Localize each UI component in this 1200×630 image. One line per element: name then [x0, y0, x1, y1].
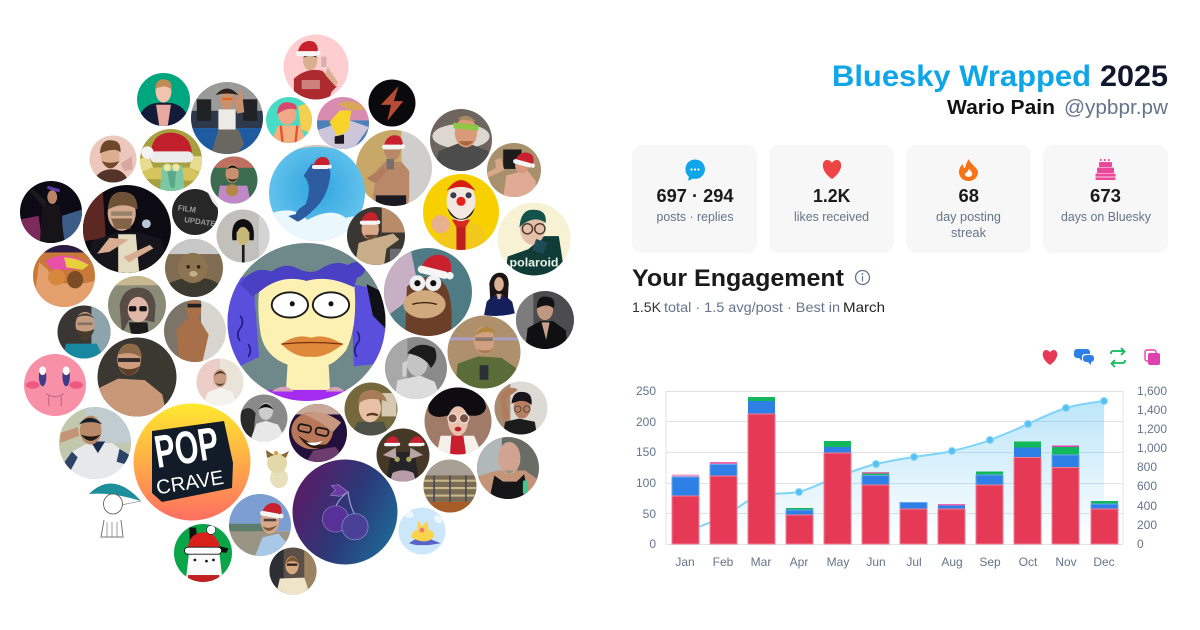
- bar Mar: [748, 397, 775, 544]
- avatar: man with polaroid shirt: polaroid: [510, 256, 558, 270]
- month labels: Jul: [906, 555, 922, 569]
- avatar: wig on stand: [216, 210, 270, 262]
- avatar: bearded man curly hair: [90, 136, 136, 182]
- avatar: kirby pink face: [24, 354, 86, 416]
- left axis labels: 100: [636, 476, 656, 490]
- avatar: person on bus seats: [191, 82, 263, 154]
- avatar: meowth sprite: [266, 450, 289, 488]
- avatar: blond man in green shirt: [448, 316, 520, 388]
- right axis labels: 1,400: [1137, 403, 1167, 417]
- avatar: man in black jacket: [516, 291, 574, 349]
- month labels: [675, 555, 1115, 569]
- avatar: bald man in black tank: [477, 437, 539, 499]
- avatar: cartoon duck-lipped character with purple hair: [228, 243, 386, 401]
- avatar: man with santa hat at desk: [347, 207, 405, 265]
- avatar: man on stage: [20, 181, 82, 243]
- month labels: Sep: [979, 555, 1001, 569]
- avatar: pochacco with santa hat: [174, 524, 232, 582]
- panel: stat streak: [906, 145, 1031, 253]
- bar Jul: [900, 502, 927, 544]
- panel: stat posts and replies: [632, 145, 757, 253]
- avatar: rainbow party shirtless: [33, 245, 95, 307]
- cumulative area: [685, 401, 1104, 544]
- avatar: pop crave logo: POP: [151, 417, 222, 478]
- bar Sep: [976, 472, 1003, 544]
- engagement summary: [632, 299, 885, 315]
- right axis labels: 400: [1137, 499, 1157, 513]
- chart legend: [1043, 348, 1160, 367]
- month labels: Dec: [1093, 555, 1115, 569]
- right axis labels: 1,200: [1137, 422, 1167, 436]
- bar Jan: [672, 474, 699, 544]
- left axis labels: 250: [636, 384, 656, 398]
- avatar: film updates sticker: [172, 189, 221, 235]
- avatar: man in tan cap: [344, 382, 398, 436]
- avatar: man with glasses in black jacket: [83, 185, 171, 273]
- avatar: bearded shirtless man in glasses: [98, 338, 176, 416]
- avatar: man at beach with santa hat: [229, 494, 291, 556]
- avatar: shirtless selfie with santa hat: [356, 130, 432, 206]
- month labels: Nov: [1055, 555, 1077, 569]
- line points: [796, 398, 1108, 496]
- bar Apr: [786, 508, 813, 544]
- avatar: woman in blue cut-out: [484, 273, 515, 316]
- avatar: pop crave logo: CRAVE: [155, 467, 225, 499]
- heading: Your Engagement: Your Engagement: [632, 265, 844, 292]
- right axis labels: [1137, 384, 1167, 551]
- panel: stat likes: [769, 145, 894, 253]
- avatar: illustrated character in suspenders: [266, 97, 312, 143]
- avatar: man in white tee by wall: [196, 358, 244, 406]
- panel: title and user: [832, 60, 1169, 119]
- avatar: squidward with santa hat: [140, 129, 202, 191]
- avatar: man in navy suit on green: [137, 73, 190, 126]
- avatar: yellow cartoon with cowboy hat: [317, 97, 369, 149]
- avatar: man with polaroid shirt: [498, 202, 570, 276]
- avatar: dolphin illustration with santa hat: [269, 145, 365, 241]
- left axis labels: 150: [636, 445, 656, 459]
- bar May: [824, 441, 851, 544]
- left axis labels: 200: [636, 415, 656, 429]
- bar Nov: [1052, 446, 1079, 544]
- label: day posting: [936, 209, 1001, 224]
- month labels: Jan: [675, 555, 695, 569]
- label second line: streak: [951, 225, 986, 240]
- engagement summary: 1.5K: [632, 299, 662, 315]
- right axis labels: 1,000: [1137, 441, 1167, 455]
- icon: info: [856, 270, 870, 284]
- month labels: Jun: [866, 555, 886, 569]
- month labels: Feb: [713, 555, 734, 569]
- avatar: man with green headband: [430, 109, 492, 171]
- avatar: shirtless man mirror selfie: [164, 300, 226, 362]
- icon: cake: [1096, 159, 1116, 180]
- avatar: newspaper building: [424, 460, 476, 512]
- avatar: grumpy scottish fold cat: [165, 239, 223, 297]
- label: days on Bluesky: [1061, 209, 1151, 224]
- avatar: man with glasses smiling: [289, 404, 347, 462]
- avatar: man in white jersey: [59, 407, 131, 479]
- avatar: sketch character with teal umbrella: [89, 484, 141, 537]
- avatar: red lightning on black: [368, 80, 416, 126]
- avatar: film updates sticker: UPDATES: [184, 215, 221, 229]
- avatar: muscle flex with santa hat: [487, 143, 541, 197]
- avatar: person with sunglasses and cream shirt: [270, 548, 316, 594]
- chart: monthly engagement stacked bars with cumulative line: [636, 384, 1167, 569]
- avatar: two sphynx cats with santa hats: [376, 428, 430, 482]
- month labels: Oct: [1019, 555, 1038, 569]
- avatar: yellow mascot on blue: [398, 508, 446, 554]
- handle: @ypbpr.pw: [1064, 97, 1169, 119]
- right axis labels: 0: [1137, 537, 1144, 551]
- panel: avatar bubble cluster: [20, 34, 574, 594]
- label: likes received: [794, 209, 869, 224]
- right axis labels: 1,600: [1137, 384, 1167, 398]
- engagement summary: total · 1.5 avg/post · Best in: [664, 299, 840, 315]
- avatar: purple cherries on gradient: [292, 460, 398, 564]
- month labels: Apr: [790, 555, 808, 569]
- avatar: black and white photo: [240, 394, 288, 442]
- icon: flame: [959, 159, 978, 181]
- avatar: pop crave logo: [134, 404, 250, 520]
- icon: likes heart: [1043, 350, 1057, 365]
- left axis labels: 0: [649, 537, 656, 551]
- bar Oct: [1014, 442, 1041, 544]
- engagement summary: March: [843, 299, 885, 315]
- heading: year: 2025: [1100, 60, 1168, 93]
- icon: heart: [823, 160, 841, 179]
- icon: chat bubble: [685, 159, 705, 180]
- left axis labels: 50: [643, 507, 656, 521]
- avatar: bearded man with glasses in car: [58, 306, 110, 358]
- month labels: Mar: [751, 555, 771, 569]
- value: 673: [1090, 186, 1121, 206]
- avatar: film updates sticker: FILM: [177, 203, 197, 215]
- value: 1.2K: [813, 186, 850, 206]
- icon: repost arrows: [1111, 348, 1125, 367]
- panel: stat days: [1043, 145, 1168, 253]
- left axis labels: [636, 384, 656, 551]
- avatar: clown on yellow: [423, 174, 499, 250]
- avatar: black and white profile man: [385, 337, 447, 399]
- heading: Bluesky Wrapped: Bluesky Wrapped: [832, 60, 1091, 93]
- right axis labels: 200: [1137, 518, 1157, 532]
- bar Aug: [938, 504, 965, 544]
- value: 68: [958, 186, 979, 206]
- month labels: May: [827, 555, 849, 569]
- right axis labels: 800: [1137, 460, 1157, 474]
- bar Feb: [710, 462, 737, 544]
- right axis labels: 600: [1137, 479, 1157, 493]
- month labels: Aug: [941, 555, 963, 569]
- avatar: drag queen with sunglasses: [424, 387, 492, 454]
- avatar: curly hair man with round glasses: [494, 382, 548, 434]
- avatar: man eating burger: [210, 156, 258, 204]
- label: posts · replies: [656, 209, 734, 224]
- bar Dec: [1091, 501, 1118, 544]
- bar Jun: [862, 472, 889, 544]
- display name: Wario Pain: [947, 97, 1055, 119]
- avatar: man in red hoodie with santa hat: [284, 34, 348, 100]
- bars: [672, 397, 1118, 544]
- icon: replies bubbles: [1074, 349, 1094, 365]
- icon: quotes squares: [1145, 350, 1160, 365]
- avatar: cartoon ape with santa hat: [384, 248, 472, 336]
- value: 697 · 294: [656, 186, 734, 206]
- avatar: woman with sunglasses: [108, 276, 166, 334]
- cumulative line: [685, 401, 1104, 532]
